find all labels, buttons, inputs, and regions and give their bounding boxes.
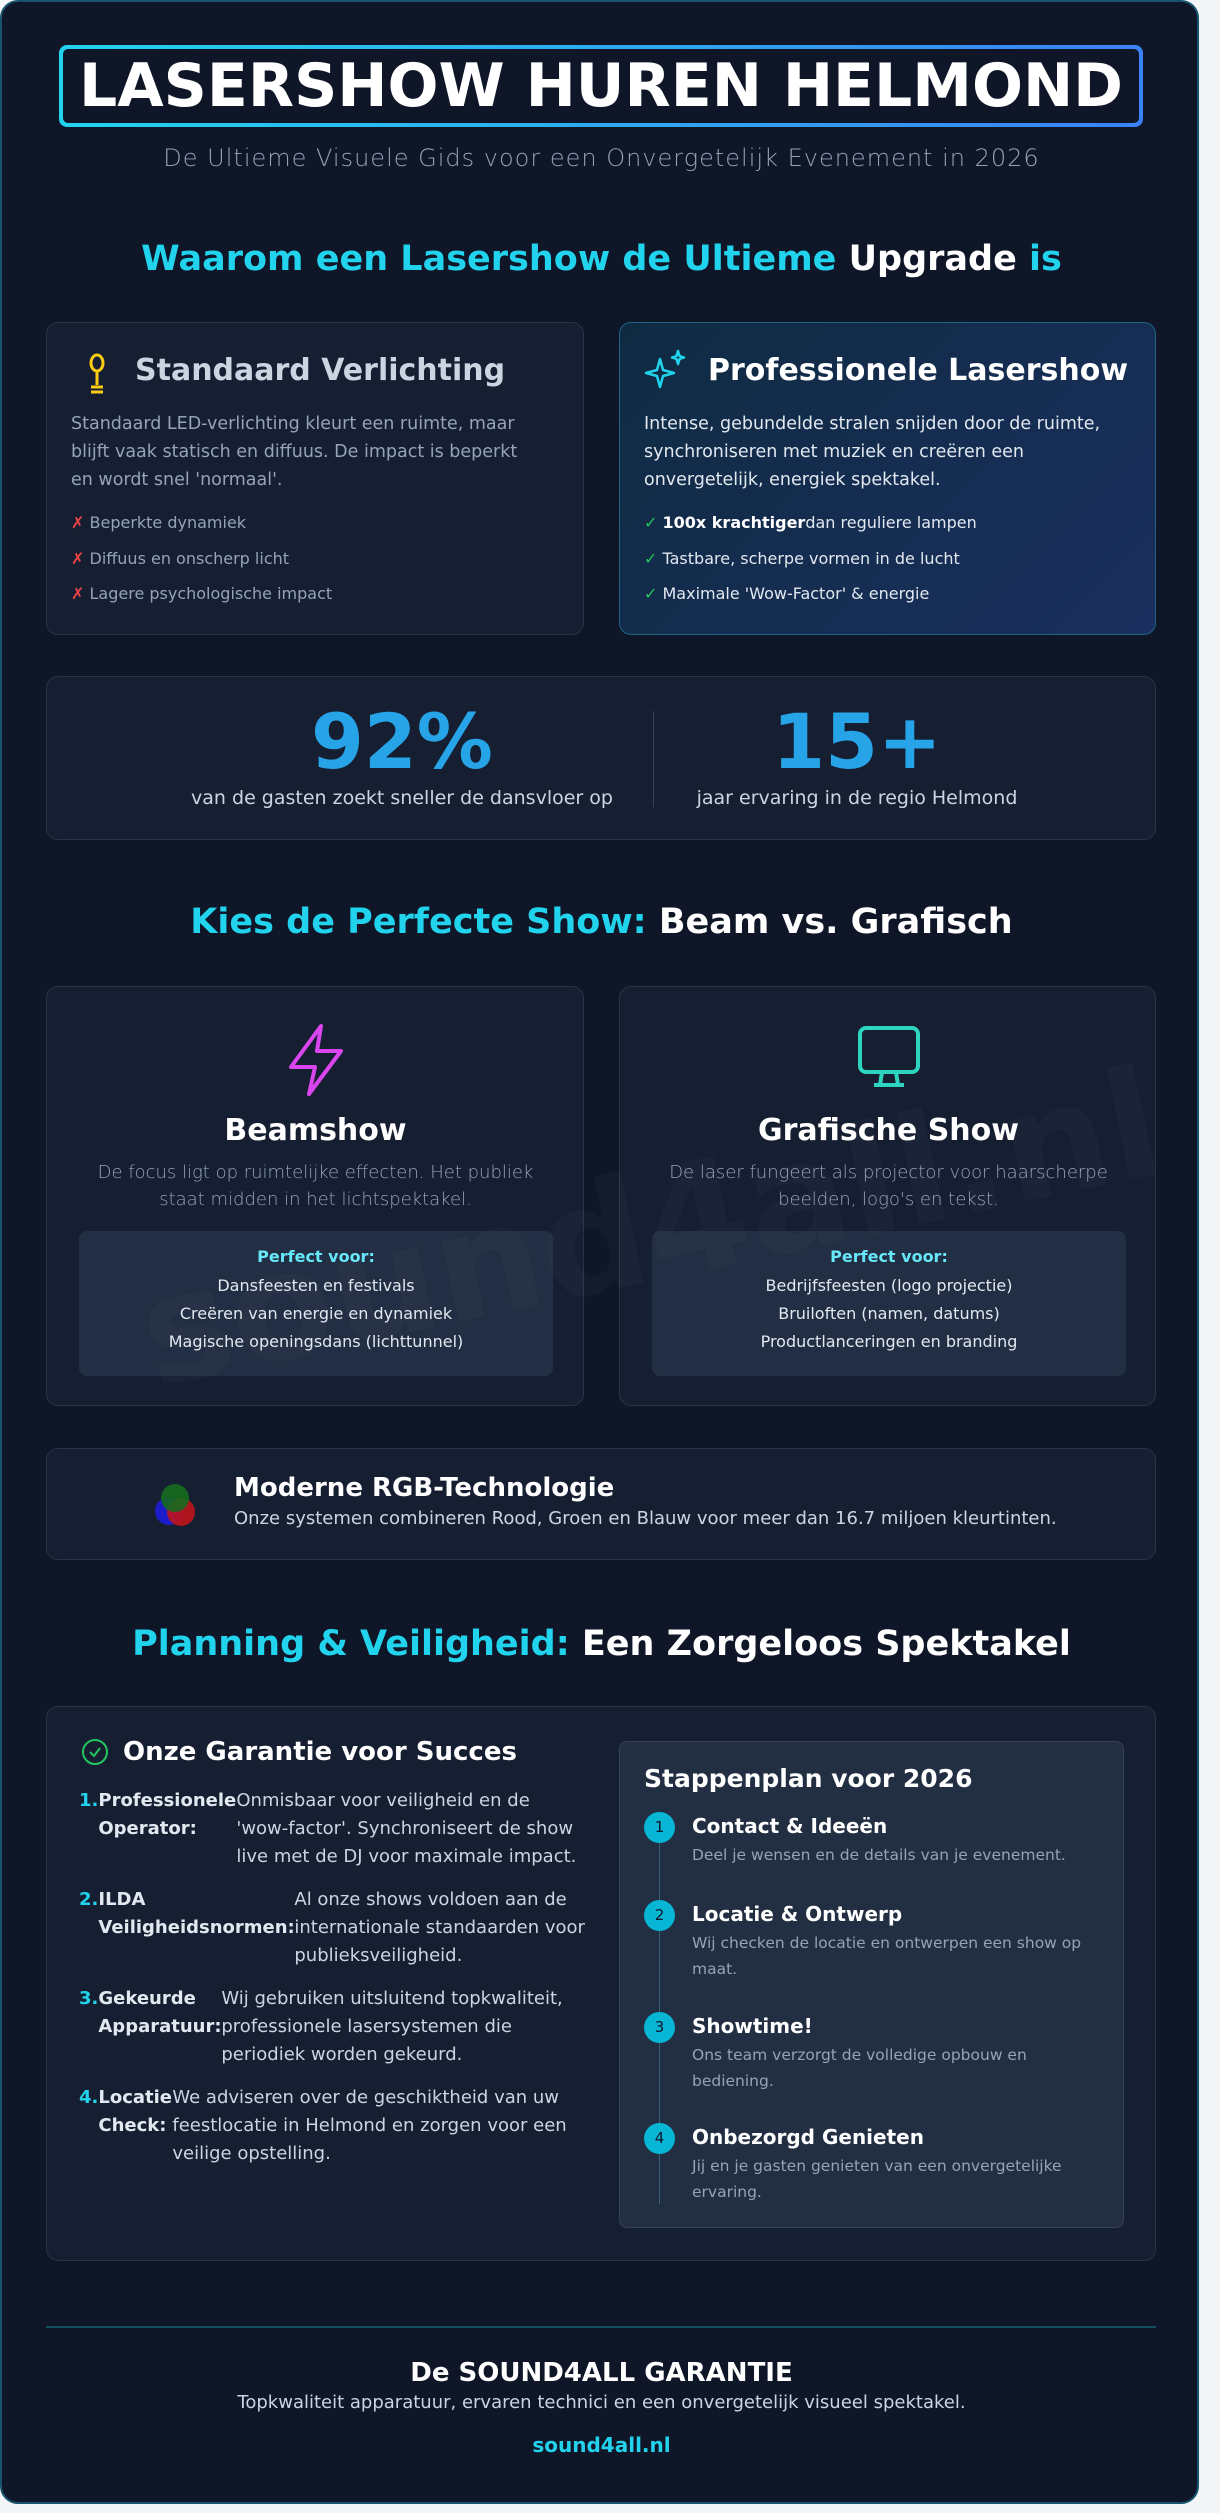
- description: De laser fungeert als projector voor haarscherpe beelden, logo's en tekst.: [669, 1162, 1108, 1210]
- list: cons: ✗ Diffuus en onscherp licht: [71, 548, 289, 568]
- step 1: 1: [655, 1818, 664, 1836]
- icon: sparkles: [644, 350, 686, 388]
- heading: Professionele Lasershow: [708, 353, 1128, 388]
- stat: 15+: jaar ervaring in de regio Helmond: [697, 787, 1017, 809]
- panel: stats: [46, 676, 1156, 840]
- heading: kies de perfecte show: Kies de Perfecte Show: Beam vs. Grafisch: [190, 902, 1013, 942]
- list: pros: ✓ Tastbare, scherpe vormen in de lucht: [644, 548, 960, 568]
- box: perfect voor: Bedrijfsfeesten (logo projectie): [766, 1276, 1012, 1295]
- panel: stappenplan: [619, 1741, 1124, 2228]
- subtitle: De Ultieme Visuele Gids voor een Onvergetelijk Evenement in 2026: [163, 144, 1040, 172]
- step 3: [644, 2012, 1027, 2090]
- panel: rgb technologie: [46, 1448, 1156, 1560]
- body text: Intense, gebundelde stralen snijden door de ruimte, synchroniseren met muziek en creëren een onvergetelijk, energiek spektakel.: [644, 414, 1100, 490]
- footer: Topkwaliteit apparatuur, ervaren technici en een onvergetelijk visueel spektakel.: [237, 2392, 966, 2413]
- box: perfect voor: Perfect voor:: [830, 1247, 948, 1266]
- step 4: Onbezorgd Genieten: [692, 2125, 924, 2149]
- list: garanties: Professionele Operator:: [98, 1790, 236, 1839]
- icon: bulb: [90, 354, 104, 394]
- list: garanties: We adviseren over de geschiktheid van uw feestlocatie in Helmond en zorgen voor een veilige opstelling.: [172, 2087, 567, 2164]
- panel: beamshow: [46, 986, 584, 1406]
- icon: rgb circles: [155, 1484, 195, 1526]
- icon: monitor: [858, 1026, 920, 1087]
- panel: planning: [46, 1706, 1156, 2261]
- step 2: 2: [655, 1906, 664, 1924]
- panel: professionele lasershow: [619, 322, 1156, 635]
- step 4: 4: [655, 2129, 664, 2147]
- step 1: Contact & Ideeën: [692, 1814, 887, 1838]
- description: De focus ligt op ruimtelijke effecten. Het publiek staat midden in het lichtspektakel.: [98, 1162, 533, 1210]
- heading: Moderne RGB-Technologie: [234, 1473, 614, 1503]
- step 3: Ons team verzorgt de volledige opbouw en bediening.: [692, 2046, 1027, 2090]
- watermark: sound4all.nl: [125, 1036, 1176, 1422]
- list: garanties: Locatie Check:: [98, 2087, 172, 2136]
- step 2: [644, 1900, 1081, 1978]
- footer: De SOUND4ALL GARANTIE: [410, 2358, 793, 2388]
- list: garanties: ILDA Veiligheidsnormen:: [98, 1889, 295, 1938]
- list: pros: ✓ 100x krachtigerdan reguliere lampen: [644, 513, 977, 532]
- list: cons: ✗ Lagere psychologische impact: [71, 584, 332, 603]
- list: garanties: 4.: [79, 2087, 98, 2108]
- stat: 92%: van de gasten zoekt sneller de dansvloer op: [191, 787, 613, 809]
- step 2: Wij checken de locatie en ontwerpen een show op maat.: [692, 1934, 1081, 1978]
- panel: grafische show: [619, 986, 1156, 1406]
- list: cons: [71, 513, 332, 603]
- step 2: Locatie & Ontwerp: [692, 1902, 902, 1926]
- list: garanties: 1.: [79, 1790, 98, 1811]
- panel: standaard verlichting: [46, 322, 584, 635]
- heading: onze garantie: Onze Garantie voor Succes: [123, 1737, 517, 1767]
- step 4: Jij en je gasten genieten van een onvergetelijke ervaring.: [692, 2157, 1062, 2201]
- box: perfect voor: [79, 1231, 553, 1376]
- stat: 15+: [696, 697, 1017, 809]
- list: garanties: Al onze shows voldoen aan de internationale standaarden voor publieksveiligheid.: [294, 1889, 585, 1966]
- step 3: Showtime!: [692, 2014, 813, 2038]
- heading: Beamshow: [224, 1113, 407, 1148]
- stat: 92%: 92%: [311, 697, 493, 786]
- heading: waarom: Waarom een Lasershow de Ultieme Upgrade is: [141, 239, 1062, 279]
- box: perfect voor: Perfect voor:: [257, 1247, 375, 1266]
- box: perfect voor: Magische openingsdans (lichttunnel): [169, 1332, 463, 1351]
- title: LASERSHOW HUREN HELMOND: [79, 51, 1123, 121]
- list: cons: ✗ Beperkte dynamiek: [71, 513, 246, 532]
- box: perfect voor: Dansfeesten en festivals: [217, 1276, 415, 1295]
- footer: [237, 2358, 966, 2457]
- list: pros: [644, 513, 977, 603]
- heading: Grafische Show: [758, 1113, 1019, 1148]
- text: Onze systemen combineren Rood, Groen en Blauw voor meer dan 16.7 miljoen kleurtinten.: [234, 1508, 1057, 1529]
- box: perfect voor: [652, 1231, 1126, 1376]
- list: garanties: Onmisbaar voor veiligheid en de 'wow-factor'. Synchroniseert de show live met de DJ voor maximale impact.: [236, 1790, 576, 1867]
- list: garanties: Wij gebruiken uitsluitend topkwaliteit, professionele lasersystemen die periodiek worden gekeurd.: [221, 1988, 563, 2065]
- heading: Stappenplan voor 2026: [644, 1764, 972, 1793]
- footer: sound4all.nl: [532, 2433, 671, 2457]
- box: perfect voor: Bruiloften (namen, datums): [778, 1304, 1000, 1323]
- step 4: [644, 2123, 1062, 2201]
- step 1: Deel je wensen en de details van je evenement.: [692, 1846, 1066, 1864]
- box: perfect voor: Productlanceringen en branding: [761, 1332, 1017, 1351]
- step 3: 3: [655, 2018, 664, 2036]
- heading: planning & veiligheid: Planning & Veiligheid: Een Zorgeloos Spektakel: [132, 1624, 1071, 1664]
- step 1: [644, 1812, 1066, 1864]
- box: perfect voor: Creëren van energie en dynamiek: [180, 1304, 452, 1323]
- icon: lightning: [288, 1024, 344, 1096]
- list: garanties: [79, 1790, 585, 2164]
- body text: Standaard LED-verlichting kleurt een ruimte, maar blijft vaak statisch en diffuus. De impact is beperkt en wordt snel 'normaal'.: [71, 414, 517, 490]
- list: garanties: Gekeurde Apparatuur:: [98, 1988, 222, 2037]
- stat: 15+: 15+: [772, 697, 942, 786]
- list: garanties: 2.: [79, 1889, 98, 1910]
- stat: 92%: [191, 697, 613, 809]
- list: pros: ✓ Maximale 'Wow-Factor' & energie: [644, 584, 929, 603]
- heading: Standaard Verlichting: [135, 353, 505, 388]
- list: garanties: 3.: [79, 1988, 98, 2009]
